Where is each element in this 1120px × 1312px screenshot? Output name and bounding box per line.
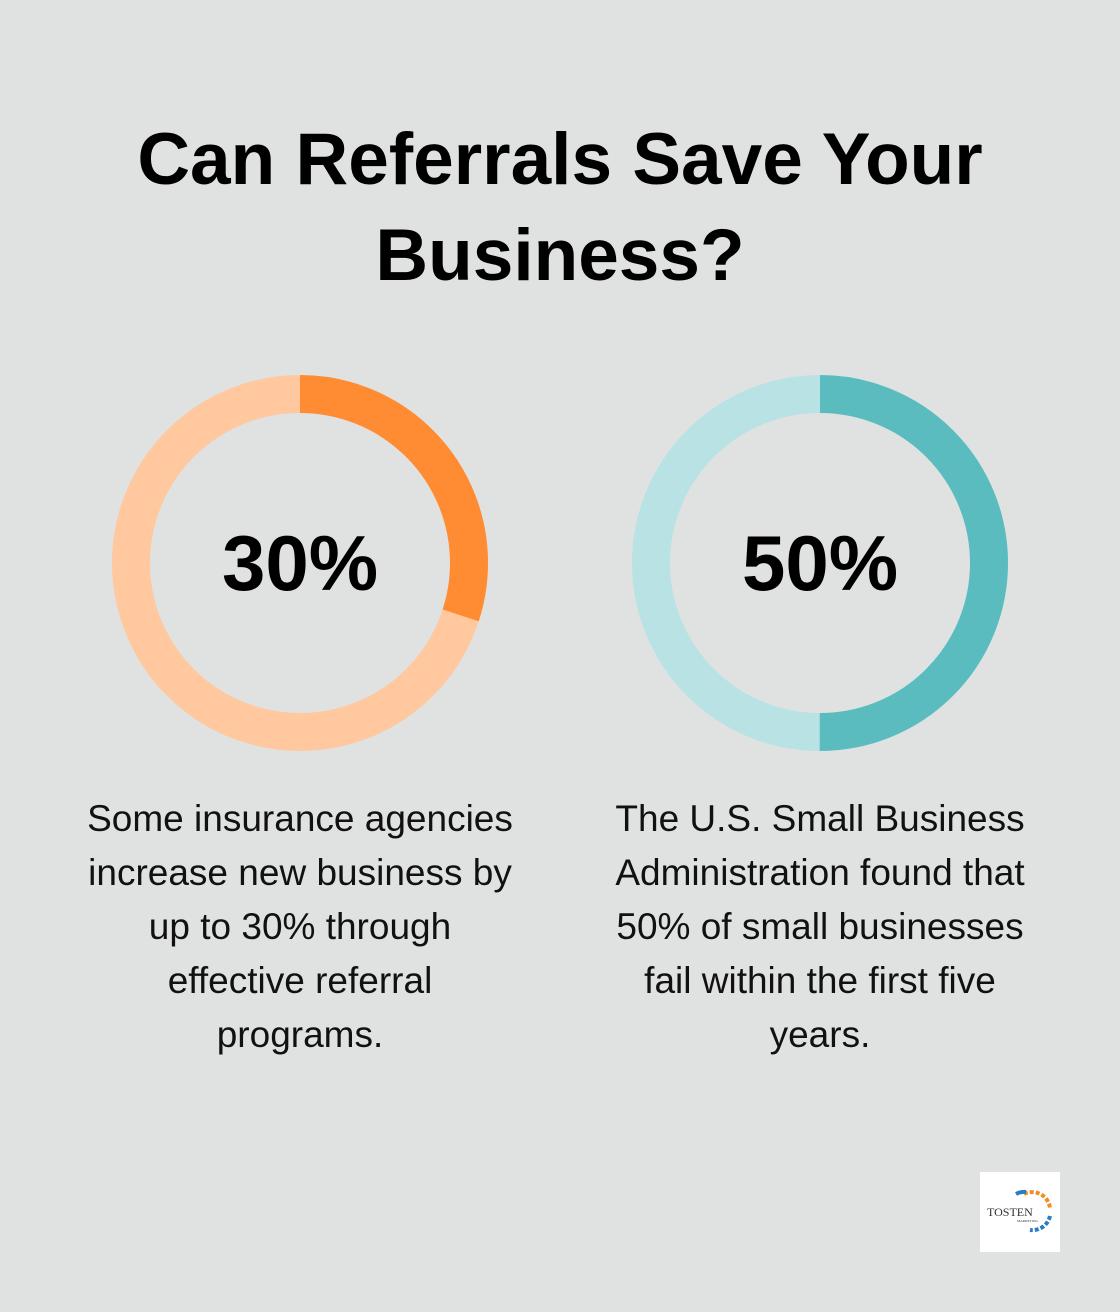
- title: Business?: [375, 215, 745, 296]
- logo: [980, 1172, 1060, 1252]
- text: referrals description: effective referral: [168, 960, 432, 1001]
- donut: 50%: [632, 375, 1008, 751]
- stat: 30%: 30%: [222, 519, 378, 607]
- text: referrals description: Some insurance agencies: [87, 798, 513, 839]
- text: referrals description: up to 30% through: [149, 906, 451, 947]
- text: SBA description: 50% of small businesses: [616, 906, 1024, 947]
- donut: 30%: [112, 375, 488, 751]
- stat: 50%: 50%: [742, 519, 898, 607]
- text: SBA description: years.: [770, 1014, 870, 1055]
- text: SBA description: Administration found that: [615, 852, 1025, 893]
- text: referrals description: increase new business by: [88, 852, 512, 893]
- text: SBA description: The U.S. Small Business: [615, 798, 1025, 839]
- text: referrals description: [87, 798, 513, 1055]
- text: referrals description: programs.: [217, 1014, 383, 1055]
- logo: MARKETING: [1017, 1219, 1038, 1223]
- title: [137, 119, 983, 296]
- title: Can Referrals Save Your: [137, 119, 983, 200]
- text: SBA description: fail within the first five: [644, 960, 996, 1001]
- text: SBA description: [615, 798, 1025, 1055]
- logo: TOSTEN: [987, 1205, 1033, 1219]
